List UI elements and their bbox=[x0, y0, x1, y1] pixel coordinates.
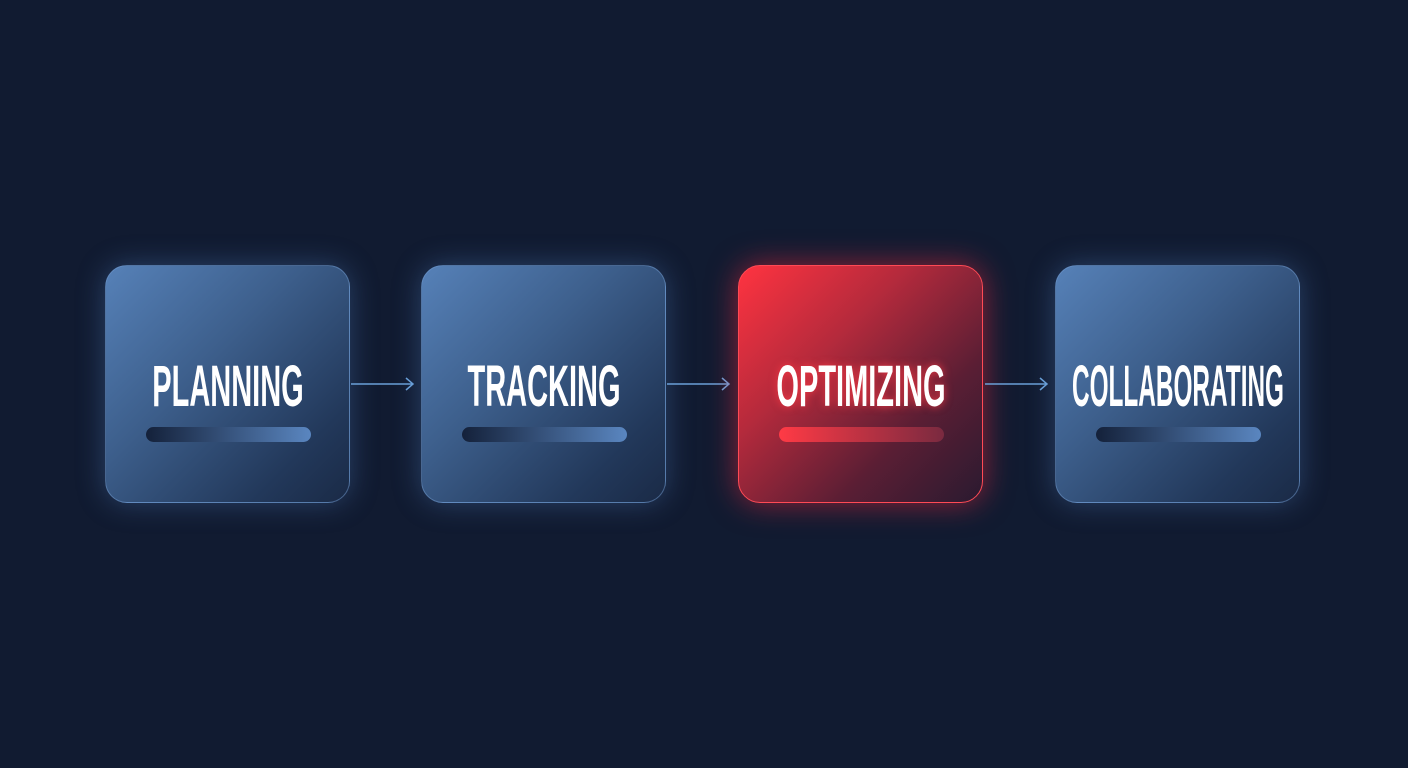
label: collaborating: COLLABORATING bbox=[1071, 354, 1284, 419]
card: collaborating bbox=[1055, 265, 1300, 503]
label: optimizing: OPTIMIZING bbox=[776, 354, 945, 419]
progress bar: optimizing bbox=[779, 427, 944, 442]
card: planning bbox=[105, 265, 350, 503]
arrow 1 bbox=[351, 378, 414, 390]
progress bar: planning bbox=[146, 427, 311, 442]
arrow 3 bbox=[985, 378, 1048, 390]
arrow 2 bbox=[667, 378, 730, 390]
label: tracking: TRACKING bbox=[467, 354, 620, 419]
label: planning: PLANNING bbox=[152, 354, 303, 419]
card: optimizing (highlighted) bbox=[738, 265, 983, 503]
progress bar: tracking bbox=[462, 427, 627, 442]
progress bar: collaborating bbox=[1096, 427, 1261, 442]
card: tracking bbox=[421, 265, 666, 503]
